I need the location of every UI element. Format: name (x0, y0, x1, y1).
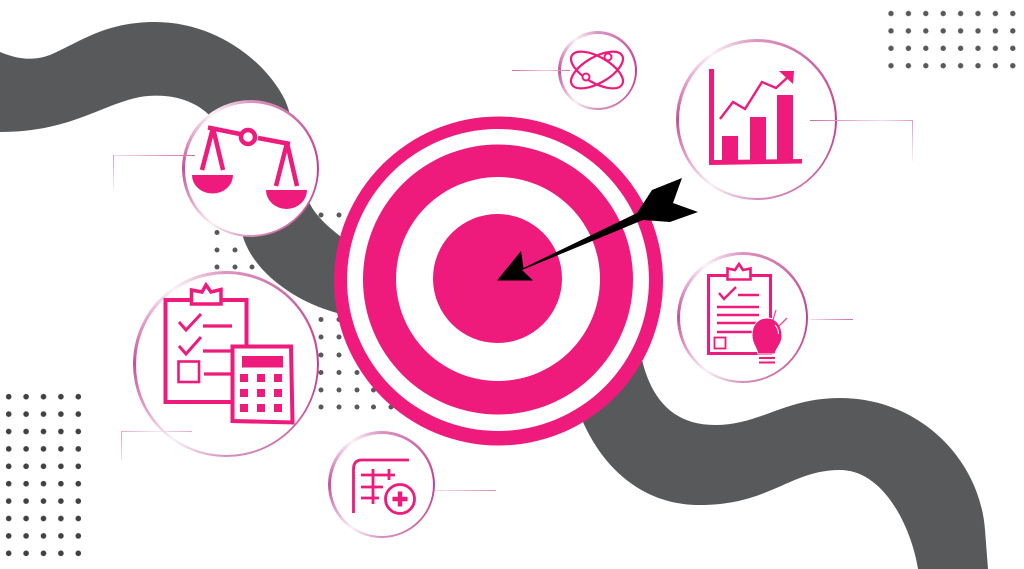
arrow (497, 178, 698, 280)
leader: atom (512, 70, 570, 72)
leader: plan (435, 490, 496, 492)
panel: checklist and calculator (133, 271, 319, 457)
circle frame (558, 31, 637, 110)
circle frame (182, 100, 319, 237)
leader: report (810, 318, 853, 320)
icon: atom (570, 50, 624, 90)
panel: growth chart (676, 39, 837, 200)
leader: scales (113, 155, 195, 190)
dot grid: top right (882, 5, 1024, 75)
panel: plan with plus (328, 431, 435, 538)
circle frame (676, 39, 837, 200)
panel: atom (558, 31, 637, 110)
panel: report with idea (677, 252, 808, 383)
circle frame (133, 271, 319, 457)
panel: scales (182, 100, 319, 237)
circle frame (328, 431, 435, 538)
target (334, 116, 663, 446)
icon: clipboard with light bulb (707, 262, 788, 364)
leader: chart (810, 120, 912, 161)
dot grid: bottom left (0, 388, 88, 563)
circle frame (677, 252, 808, 383)
grey road: lower right (580, 350, 988, 569)
grey road: upper left (0, 22, 345, 315)
icon: grid table with plus (352, 458, 416, 515)
icon: balance scale (192, 125, 307, 209)
dot grid: centre left (217, 215, 391, 407)
icon: clipboard with calculator (164, 282, 295, 424)
icon: rising bar chart (709, 69, 802, 165)
leader: checklist (121, 431, 192, 460)
